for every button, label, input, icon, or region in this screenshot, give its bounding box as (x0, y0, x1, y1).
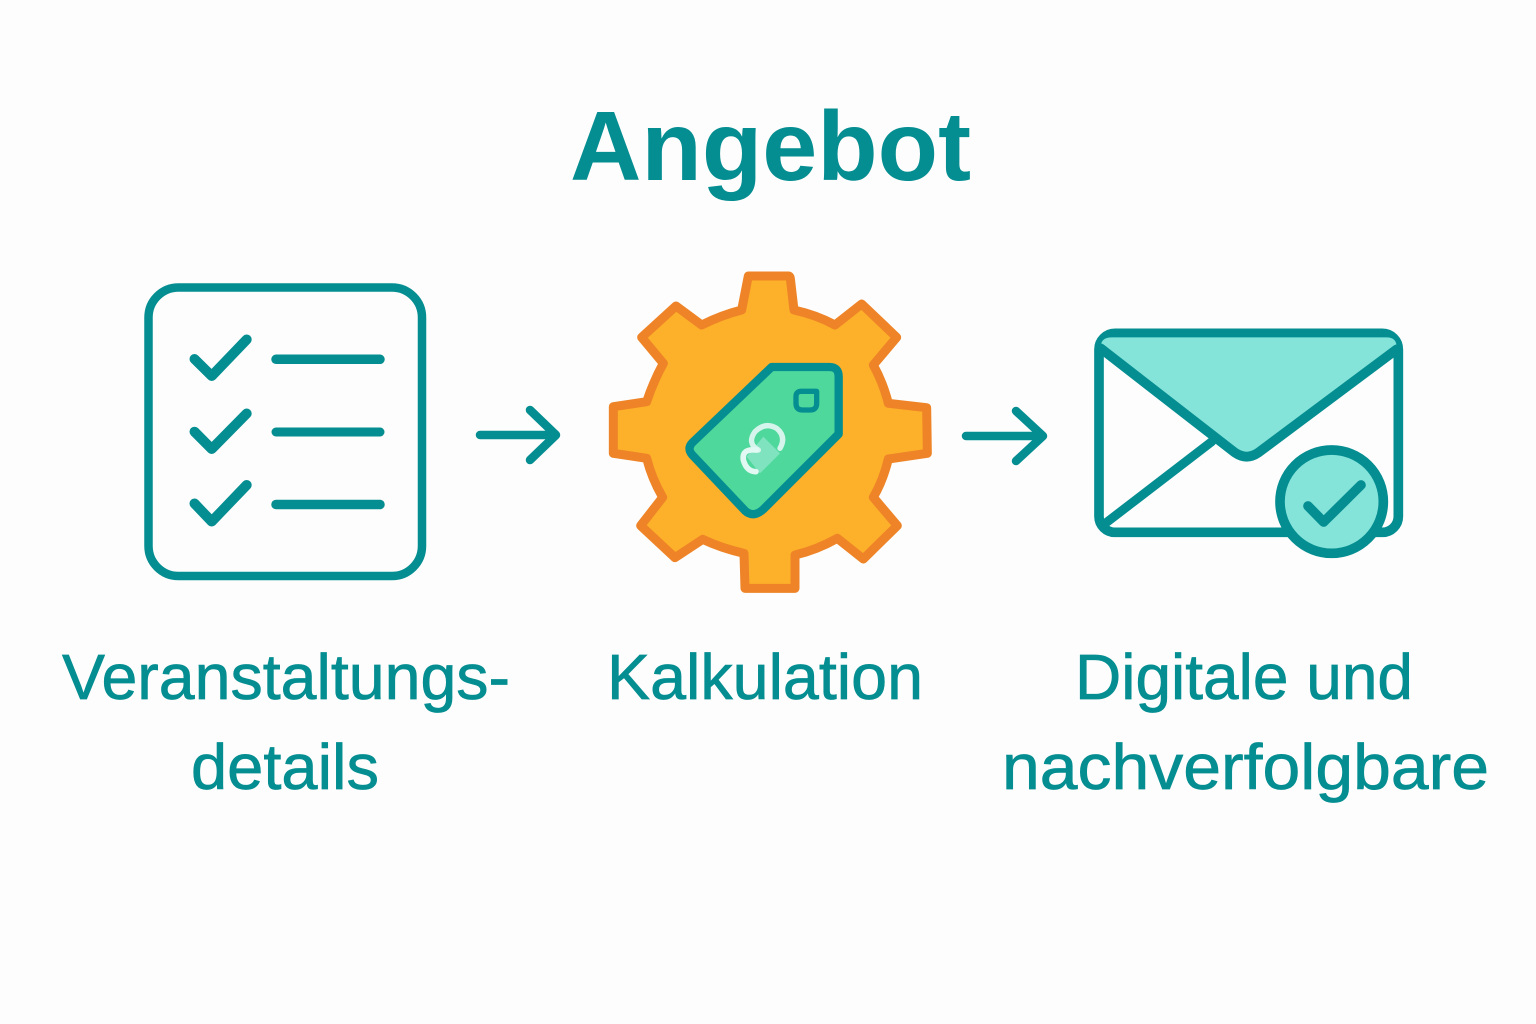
flap outline (1101, 348, 1397, 457)
arrow: calculation to envelope (966, 411, 1043, 461)
label: Veranstaltungsdetails: details (191, 731, 379, 803)
tag hole (796, 391, 817, 410)
price tag (689, 367, 839, 514)
label: Digitale und nachverfolgbare: Digitale und (1075, 641, 1413, 713)
envelope body (1099, 333, 1398, 532)
gear (613, 276, 927, 588)
label: Veranstaltungsdetails (62, 641, 510, 803)
title: Angebot (570, 91, 971, 201)
icon: checklist (148, 288, 422, 576)
arrow: checklist to calculation (480, 410, 556, 460)
check badge (1280, 450, 1383, 553)
tag symbol (743, 426, 783, 473)
check mark (1308, 485, 1361, 522)
label: Kalkulation: Kalkulation (607, 641, 923, 713)
icon: gear with price tag (613, 276, 927, 588)
label: Digitale und nachverfolgbare (1002, 641, 1489, 803)
envelope fold (1107, 442, 1212, 522)
label: Digitale und nachverfolgbare: nachverfolgbare (1002, 731, 1489, 803)
label: Veranstaltungsdetails: Veranstaltungs- (62, 641, 510, 713)
icon: envelope with check badge (1099, 333, 1398, 553)
envelope flap (1101, 337, 1397, 456)
